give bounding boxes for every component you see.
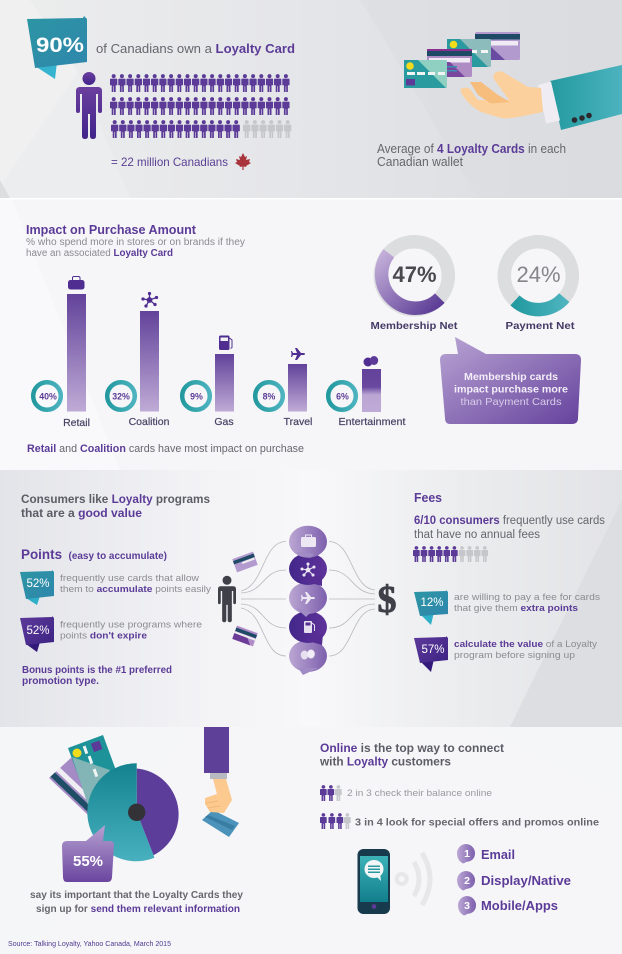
panel: value background [0,470,622,727]
bar: entertainment: 6% [336,392,349,402]
label: payment net: Payment Net [506,320,575,332]
pictogram: 2 in 3 [320,785,342,801]
banner: 52% don't expire: 52% [26,625,50,637]
callout: membership impact: than Payment Cards [460,396,562,408]
callout: 55% [62,825,114,882]
banner: 90%: 90% [36,34,84,57]
illustration: hand holding card [202,727,239,837]
icon: signal waves [397,853,430,905]
heading: online [319,741,504,768]
text: bonus points [22,665,172,687]
text: no annual fees: that have no annual fees [414,529,540,541]
bar: coalition: Coalition [129,416,170,428]
text: relevant information: say its important that the Loyalty Cards they [30,890,243,901]
icon: maple leaf [235,153,251,170]
bar: travel: 8% [263,392,276,402]
icon: lower card [232,626,258,646]
heading: fees: Fees [414,490,442,505]
bar: retail [33,276,90,429]
text: bonus points: Bonus points is the #1 preferred [22,665,172,676]
bar: gas [182,336,234,428]
item: mobile/apps: 3 [464,900,470,912]
bar: travel: Travel [284,416,312,428]
text: most impact conclusion: Retail and Coalition cards have most impact on purchase [27,443,304,455]
text: don't expire [60,620,202,642]
item: email: Email [481,848,515,862]
text: calculate the value: program before signing up [454,650,575,661]
bar chart: impact by card type [33,276,406,429]
text: check balance: 2 in 3 check their balance online [347,788,492,799]
heading: online: with Loyalty customers [319,754,451,768]
text: no annual fees: 6/10 consumers frequently use cards [414,515,605,527]
bubble: gas [289,611,327,645]
bar: retail: Retail [63,417,90,429]
icon: dollar sign: $ [378,579,396,621]
text: relevant information: sign up for send them relevant information [36,904,240,915]
banner: 52% don't expire [20,616,54,652]
banner: 12% [414,590,448,625]
text: accumulate points: them to accumulate points easily [60,584,211,595]
text: average 4 cards: Canadian wallet [377,155,464,169]
text: impact description: % who spend more in stores or on brands if they [26,237,245,248]
bar: travel [255,348,312,428]
icon: consumer [218,576,236,622]
heading: online: Online is the top way to connect [320,741,504,755]
item: display/native [457,871,571,890]
banner: 52% accumulate [20,570,54,605]
callout: membership impact [440,337,581,424]
bar: retail: 40% [39,392,57,402]
item: email [457,844,515,864]
pictogram: 22 million people [110,74,291,138]
callout: membership impact: impact purchase more [454,384,568,396]
banner: 52% accumulate: 52% [26,578,50,590]
donut chart: membership net 47%: 47% [392,262,437,287]
bubble: travel [289,582,327,617]
panel: online background [0,727,622,954]
text: don't expire: points don't expire [60,630,147,642]
text: pay a fee [454,592,600,614]
icon: large person [76,72,102,139]
list: top channels [457,844,571,916]
connector lines [241,542,375,656]
text: relevant information [30,890,243,915]
bubble: retail [289,526,327,558]
text: accumulate points: frequently use cards that allow [60,573,199,584]
text: 22 million Canadians: = 22 million Canadians [111,155,228,169]
source: Source: Talking Loyalty, Yahoo Canada, March 2015 [8,939,171,948]
text: impact description [26,237,245,259]
text: average 4 cards: Average of 4 Loyalty Cards in each [377,142,566,156]
illustration: open hand and sleeve [461,65,622,130]
text: calculate the value [454,639,597,661]
bar: gas: 9% [190,392,203,402]
heading: impact on purchase amount: Impact on Purchase Amount [26,222,197,237]
heading: good value: that are a good value [21,506,142,520]
text: pay a fee: that give them extra points [454,603,578,614]
bubble: coalition [289,553,327,586]
text: don't expire: frequently use programs where [60,620,202,630]
pie chart: 55% [87,763,179,861]
panel: impact background [0,198,622,470]
banner: 57% [414,636,448,672]
callout: membership impact: Membership cards [464,371,558,383]
donut chart: membership net 47% [380,242,448,310]
pictogram: 6 of 10 people [413,546,488,562]
bar: coalition: 32% [112,392,130,402]
heading: good value: Consumers like Loyalty programs [21,492,210,506]
item: mobile/apps: Mobile/Apps [481,899,558,913]
panel: ownership background [0,0,622,198]
heading: own a loyalty card: of Canadians own a Loyalty Card [96,42,295,56]
banner: 90% [27,16,87,79]
text: accumulate points [60,573,211,595]
illustration: four loyalty cards [404,32,520,88]
banner: 12%: 12% [420,597,444,609]
text: no annual fees [414,515,605,541]
bubble: entertainment [289,640,327,675]
item: mobile/apps [458,896,558,916]
banner: 57%: 57% [421,644,445,656]
bubbles: card categories [289,526,327,675]
text: calculate the value: calculate the value of a Loyalty [454,639,597,650]
text: pay a fee: are willing to pay a fee for cards [454,592,600,603]
icon: phone [358,849,390,914]
donut chart: payment net 24% [504,242,572,310]
icon: upper card [232,552,258,572]
donut chart: payment net 24%: 24% [516,262,561,287]
label: membership net: Membership Net [370,320,458,332]
bar: coalition [107,292,170,428]
pictogram: 3 in 4 [320,813,351,829]
illustration: cards behind pie [49,735,125,815]
text: impact description: have an associated Loyalty Card [26,248,173,259]
bar: entertainment [328,356,406,428]
item: email: 1 [464,848,470,860]
text: average 4 cards [377,142,566,169]
item: display/native: Display/Native [481,874,571,888]
heading: points: Points (easy to accumulate) [21,547,167,562]
heading: good value [21,492,210,520]
bar: gas: Gas [214,416,234,428]
callout: 55%: 55% [73,853,103,870]
item: display/native: 2 [464,875,470,887]
text: bonus points: promotion type. [22,676,99,687]
text: special offers: 3 in 4 look for special offers and promos online [355,818,599,828]
bar: entertainment: Entertainment [338,416,406,428]
